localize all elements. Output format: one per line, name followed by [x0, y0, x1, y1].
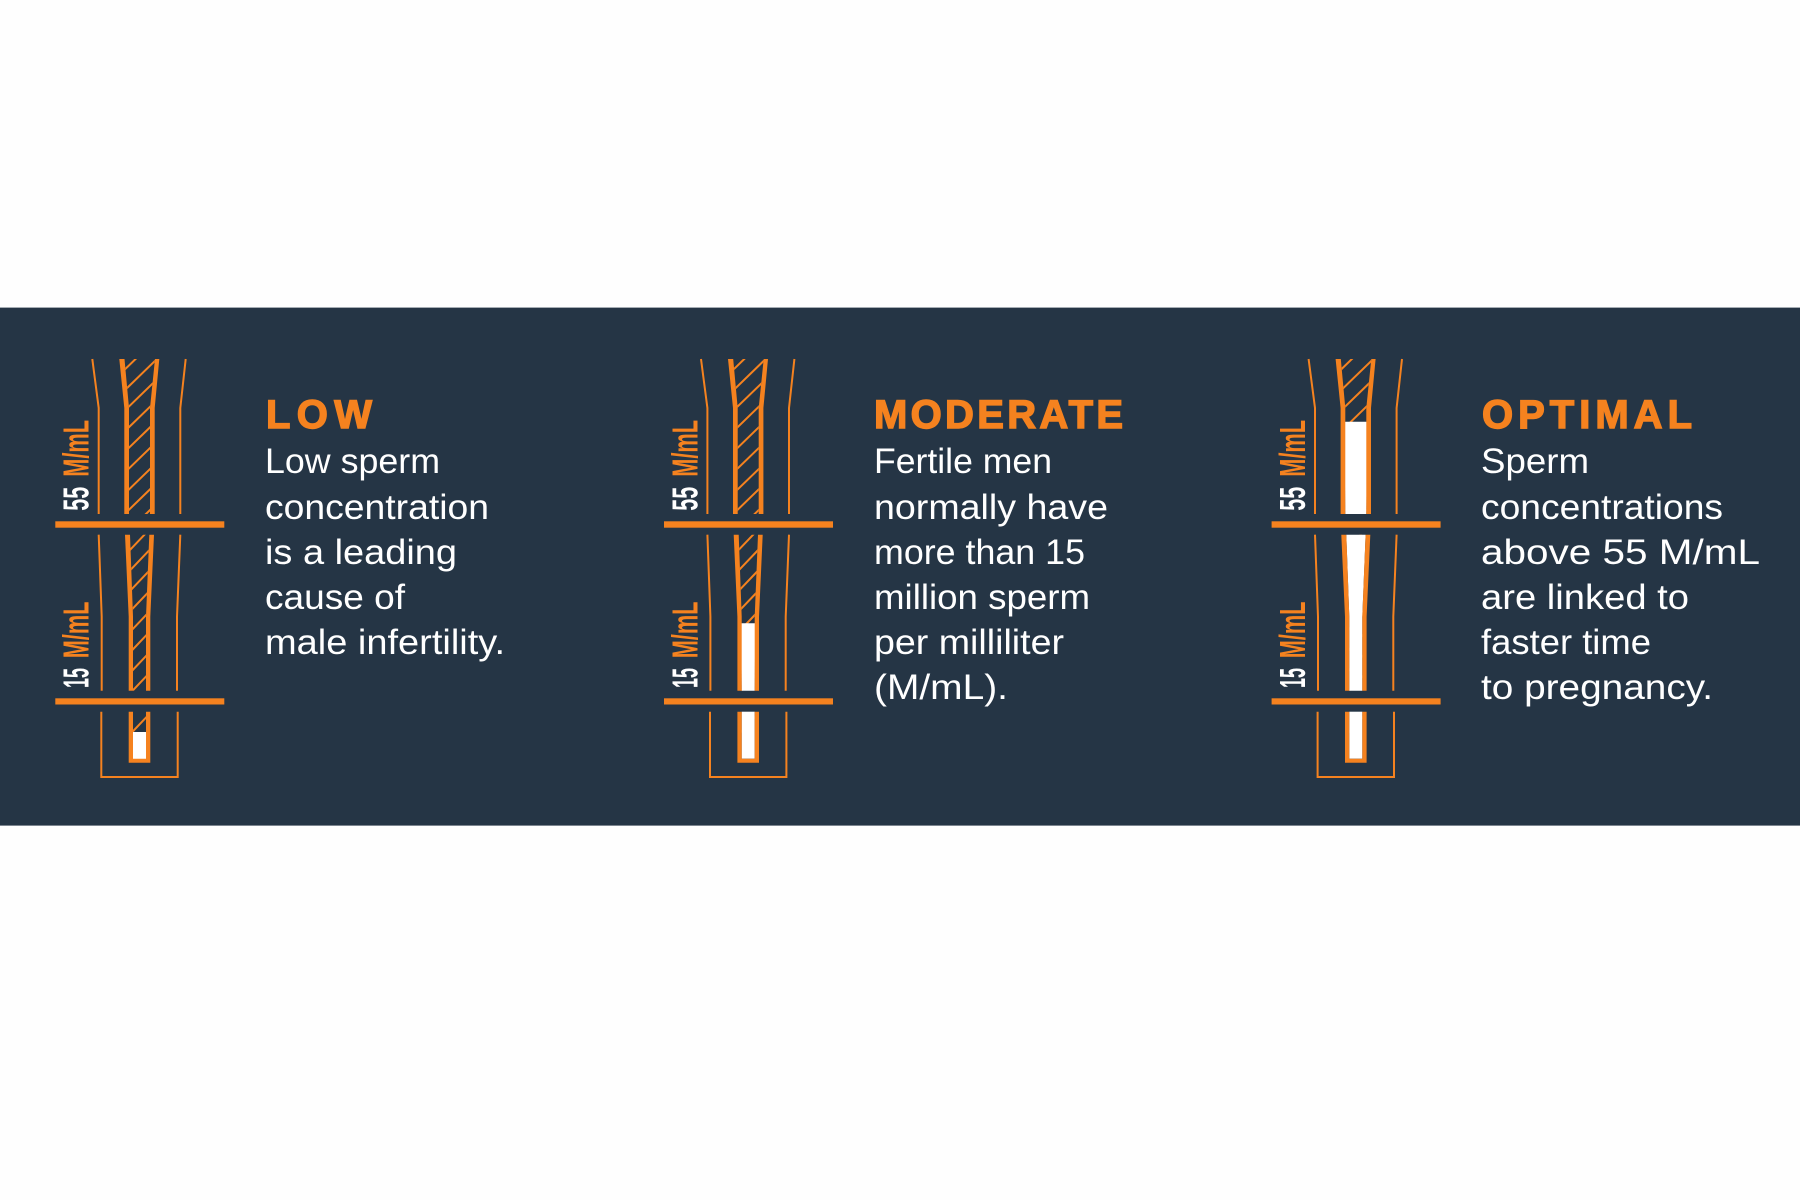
text: low description: male infertility. — [265, 623, 505, 662]
text: moderate description: normally have — [874, 488, 1108, 527]
scale label: 15 M/mL — [56, 602, 97, 688]
heading: low: LOW — [266, 393, 372, 437]
text: optimal description — [1481, 442, 1760, 707]
panel: dark band — [0, 308, 1800, 826]
scale label: 15 M/mL — [664, 602, 705, 688]
scale label: 15 M/mL: M/mL — [1272, 602, 1313, 658]
text: optimal description: are linked to — [1481, 578, 1689, 617]
scale label: 55 M/mL: 55 — [664, 487, 705, 511]
text: optimal description: above 55 M/mL — [1481, 533, 1760, 572]
gauge: moderate level — [664, 330, 833, 777]
text: optimal description: faster time — [1481, 623, 1651, 662]
scale label: 55 M/mL — [664, 420, 705, 511]
heading: optimal: OPTIMAL — [1482, 393, 1692, 437]
text: optimal description: to pregnancy. — [1481, 668, 1713, 707]
text: moderate description: (M/mL). — [874, 668, 1008, 707]
text: optimal description: Sperm — [1481, 442, 1589, 481]
scale label: 15 M/mL: 15 — [1272, 668, 1313, 688]
scale label: 15 M/mL: 15 — [56, 668, 97, 688]
scale label: 55 M/mL: 55 — [1272, 487, 1313, 511]
scale label: 55 M/mL: M/mL — [56, 420, 97, 477]
text: low description: cause of — [265, 578, 405, 617]
panel: moderate concentration — [664, 330, 1123, 777]
heading: moderate: MODERATE — [874, 393, 1123, 437]
panel: optimal concentration — [1272, 330, 1760, 777]
text: low description: is a leading — [265, 533, 457, 572]
scale label: 55 M/mL: M/mL — [664, 420, 705, 477]
scale label: 55 M/mL: M/mL — [1272, 420, 1313, 477]
scale label: 55 M/mL — [1272, 420, 1313, 511]
gauge: low level — [55, 330, 224, 777]
scale label: 15 M/mL: 15 — [664, 668, 705, 688]
scale label: 15 M/mL — [1272, 602, 1313, 688]
scale label: 55 M/mL: 55 — [56, 487, 97, 511]
text: low description: concentration — [265, 488, 489, 527]
text: optimal description: concentrations — [1481, 488, 1723, 527]
text: moderate description: more than 15 — [874, 533, 1085, 572]
gauge: optimal level — [1272, 330, 1441, 777]
text: moderate description — [874, 442, 1108, 707]
text: moderate description: per milliliter — [874, 623, 1064, 662]
scale label: 15 M/mL: M/mL — [664, 602, 705, 658]
scale label: 55 M/mL — [56, 420, 97, 511]
text: low description: Low sperm — [265, 442, 440, 481]
text: low description — [265, 442, 505, 662]
panel: low concentration — [55, 330, 505, 777]
text: moderate description: Fertile men — [874, 442, 1052, 481]
text: moderate description: million sperm — [874, 578, 1090, 617]
scale label: 15 M/mL: M/mL — [56, 602, 97, 658]
